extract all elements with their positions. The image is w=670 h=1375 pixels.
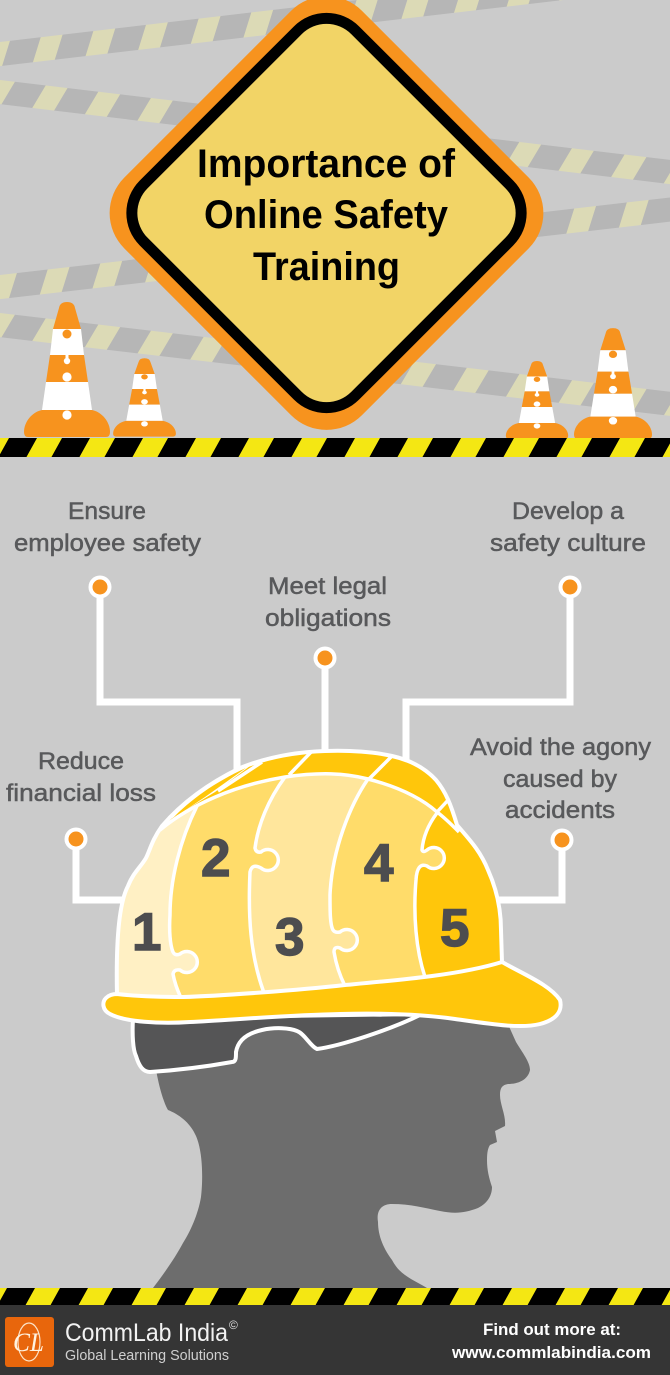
- caution tape 2: [0, 75, 670, 193]
- copyright mark: ©: [229, 1318, 238, 1332]
- warning sign with title: Importance of: [197, 142, 456, 186]
- label: safety culture: Develop a: [512, 498, 625, 525]
- label: financial loss: financial loss: [6, 780, 156, 807]
- label: avoid agony: [470, 734, 651, 824]
- label: legal obligations: Meet legal: [268, 573, 387, 600]
- warning sign with title: [89, 0, 564, 451]
- label: employee safety: [14, 498, 201, 557]
- label: safety culture: [490, 498, 646, 557]
- label: employee safety: Ensure: [68, 498, 146, 525]
- caution tape 4: [0, 308, 670, 425]
- footer call to action: Find out more at:: [483, 1320, 621, 1339]
- connector 5: [496, 830, 572, 900]
- footer call to action: [451, 1320, 651, 1362]
- warning sign with title: Online Safety: [204, 193, 449, 237]
- label: avoid agony: Avoid the agony: [470, 734, 651, 761]
- label: financial loss: [6, 748, 156, 807]
- number 5: 5: [440, 899, 469, 958]
- label: avoid agony: accidents: [505, 797, 615, 824]
- company name: CommLab India: [65, 1319, 228, 1347]
- number 2: 2: [201, 829, 230, 888]
- safety glasses strap: [133, 1014, 422, 1072]
- traffic cone small right: [506, 361, 568, 439]
- number 1: 1: [132, 903, 161, 962]
- label: safety culture: safety culture: [490, 530, 646, 557]
- helmet brim: [103, 962, 561, 1026]
- head silhouette: [150, 1000, 530, 1288]
- helmet outline: [117, 751, 502, 995]
- number 4: 4: [364, 834, 394, 893]
- logo mark: CL: [13, 1328, 44, 1357]
- traffic cone small left: [113, 358, 176, 437]
- connector 3: [316, 648, 334, 755]
- connector 2: [90, 578, 237, 770]
- label: legal obligations: [265, 573, 391, 632]
- hazard stripe top: [0, 438, 670, 457]
- logo mark: [5, 1317, 54, 1367]
- caution tape 3: [0, 188, 670, 304]
- helmet: [101, 748, 563, 1028]
- traffic cone large right: [574, 328, 652, 439]
- helmet dome segments: [118, 752, 500, 995]
- company tagline: Global Learning Solutions: [65, 1347, 229, 1364]
- label: employee safety: employee safety: [14, 530, 201, 557]
- connector 1: [66, 830, 125, 900]
- number 3: 3: [275, 908, 304, 967]
- label: financial loss: Reduce: [38, 748, 124, 775]
- footer call to action: www.commlabindia.com: [451, 1343, 651, 1362]
- hazard stripe bottom: [0, 1288, 670, 1305]
- traffic cone large left: [24, 302, 110, 437]
- connector 4: [406, 578, 580, 760]
- label: legal obligations: obligations: [265, 605, 391, 632]
- label: avoid agony: caused by: [503, 766, 617, 793]
- footer background: [0, 1305, 670, 1375]
- warning sign with title: Training: [253, 245, 400, 289]
- caution tape 1: [0, 0, 670, 72]
